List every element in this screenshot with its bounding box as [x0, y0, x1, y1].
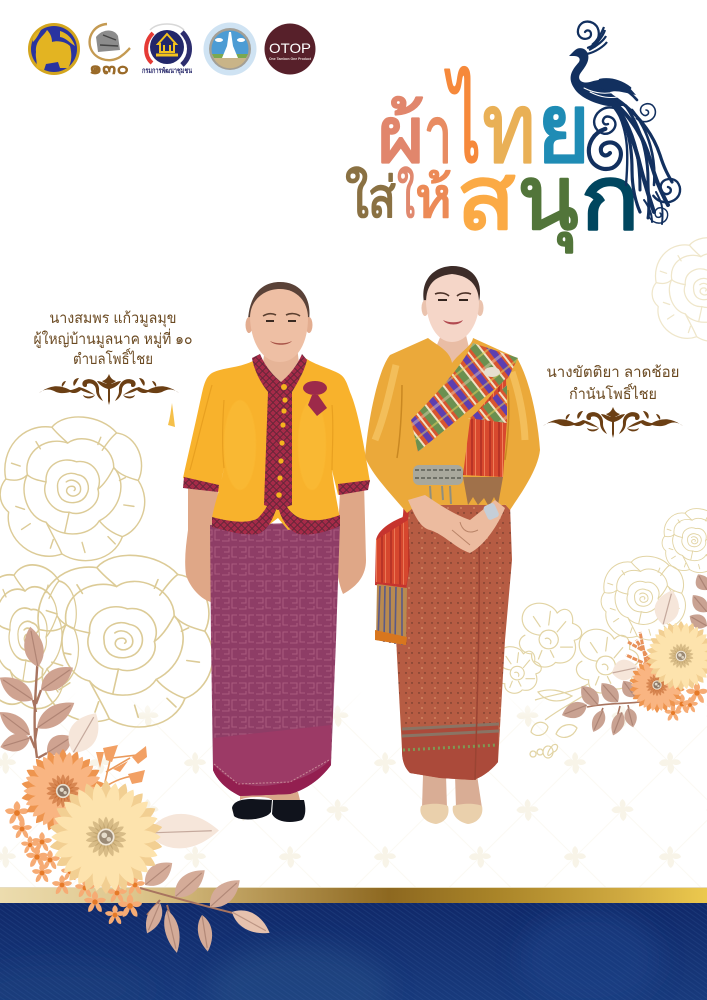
arms and hands — [185, 482, 366, 602]
bouquet: lower right flowers — [559, 571, 707, 738]
logo row — [28, 22, 316, 79]
buttons — [276, 384, 288, 498]
bouquet: lower left flowers — [0, 625, 274, 954]
branch stem — [30, 653, 47, 758]
branch leaves — [559, 571, 707, 738]
title line two: ใ — [397, 166, 415, 229]
yellow daisy — [42, 774, 170, 900]
logo: 130th anniversary — [89, 24, 130, 79]
logo: provincial lion seal — [28, 23, 80, 75]
background: lattice motif pattern — [0, 690, 707, 888]
orange daisy — [626, 654, 688, 716]
lower branch — [140, 888, 233, 915]
wrapped skirt — [394, 500, 512, 780]
upper leaves — [0, 625, 79, 761]
shoes — [232, 792, 305, 822]
lower leaves — [139, 855, 274, 954]
blouse — [183, 358, 370, 530]
orange daisy — [17, 745, 109, 837]
branch stem — [587, 702, 640, 730]
title line two: ส่ — [368, 166, 396, 229]
skirt — [210, 522, 340, 796]
figure: left woman in yellow blouse and maroon skirt — [183, 282, 370, 822]
logo: 130th anniversary: ๑๓๐ — [89, 58, 129, 79]
title line one: า — [424, 91, 452, 179]
neck — [262, 346, 300, 392]
gold blouse — [365, 338, 540, 513]
corsage — [303, 381, 327, 416]
title line one: ท — [482, 73, 536, 183]
icon: peacock — [569, 22, 683, 224]
pale leaves — [61, 706, 220, 849]
title line one: ผ้ — [377, 91, 425, 179]
small blossoms — [660, 682, 707, 721]
logo: OTOP — [264, 24, 316, 74]
head — [422, 266, 484, 342]
caption: right person: นางขัตติยา ลาดช้อย — [546, 364, 680, 381]
shoes and legs — [420, 775, 482, 824]
logo: OTOP: OTOP — [269, 40, 311, 56]
gold ribbon bar — [0, 887, 707, 903]
logo: community development department: กรมการพัฒนาชุมชน — [142, 66, 193, 75]
logo: provincial stupa seal — [204, 22, 256, 76]
caption: right person — [546, 364, 680, 403]
caption: left person: ตำบลโพธิ์ไชย — [73, 348, 153, 368]
title line one: ย — [536, 73, 591, 183]
pale leaves — [610, 587, 683, 683]
peacock head and body — [569, 48, 636, 106]
navy fabric band — [0, 903, 707, 1000]
line-art roses: top right — [652, 238, 707, 342]
logo: OTOP: One Tambon One Product — [269, 57, 312, 61]
logo: community development department — [142, 24, 193, 75]
caption: right person: กำนันโพธิ์ไชย — [569, 383, 657, 403]
peacock swirls — [589, 101, 683, 223]
title line two: นุ — [517, 149, 579, 253]
title: ผ้าไทย ใส่ให้สนุก — [345, 67, 640, 253]
silver belt — [413, 465, 463, 504]
title line one — [377, 67, 591, 185]
figure: right woman in gold blouse with plaid sash and woven skirt — [365, 266, 540, 824]
peacock crest — [578, 22, 607, 54]
decorative yellow sliver — [168, 403, 175, 427]
title line two: ห้ — [415, 166, 452, 229]
title line two: ส — [456, 149, 516, 249]
head — [246, 282, 312, 362]
ornament: right divider — [543, 407, 683, 438]
yellow daisy — [642, 617, 707, 695]
clasped hands — [408, 495, 505, 553]
ornament: left divider — [39, 374, 179, 405]
line-art flowers: lower right — [496, 509, 707, 758]
neck — [434, 335, 470, 366]
orange buds — [96, 745, 147, 785]
caption: left person: นางสมพร แก้วมูลมุข — [50, 310, 176, 328]
caption: left person — [34, 310, 192, 368]
small blossoms — [5, 801, 145, 924]
title line one: ไ — [445, 67, 481, 185]
peacock tail feathers — [584, 79, 672, 224]
caption: left person: ผู้ใหญ่บ้านมูลนาค หมู่ที่ ๑๐ — [34, 328, 192, 348]
placket and collar trim — [183, 354, 370, 535]
title line two — [345, 149, 640, 253]
orange sprigs — [626, 632, 650, 665]
long scarf with fringe — [375, 352, 417, 645]
line-art roses: left cluster — [0, 417, 213, 727]
plaid sash — [411, 343, 518, 507]
title line two: ใ — [345, 166, 369, 229]
title line two: ก — [580, 149, 640, 249]
